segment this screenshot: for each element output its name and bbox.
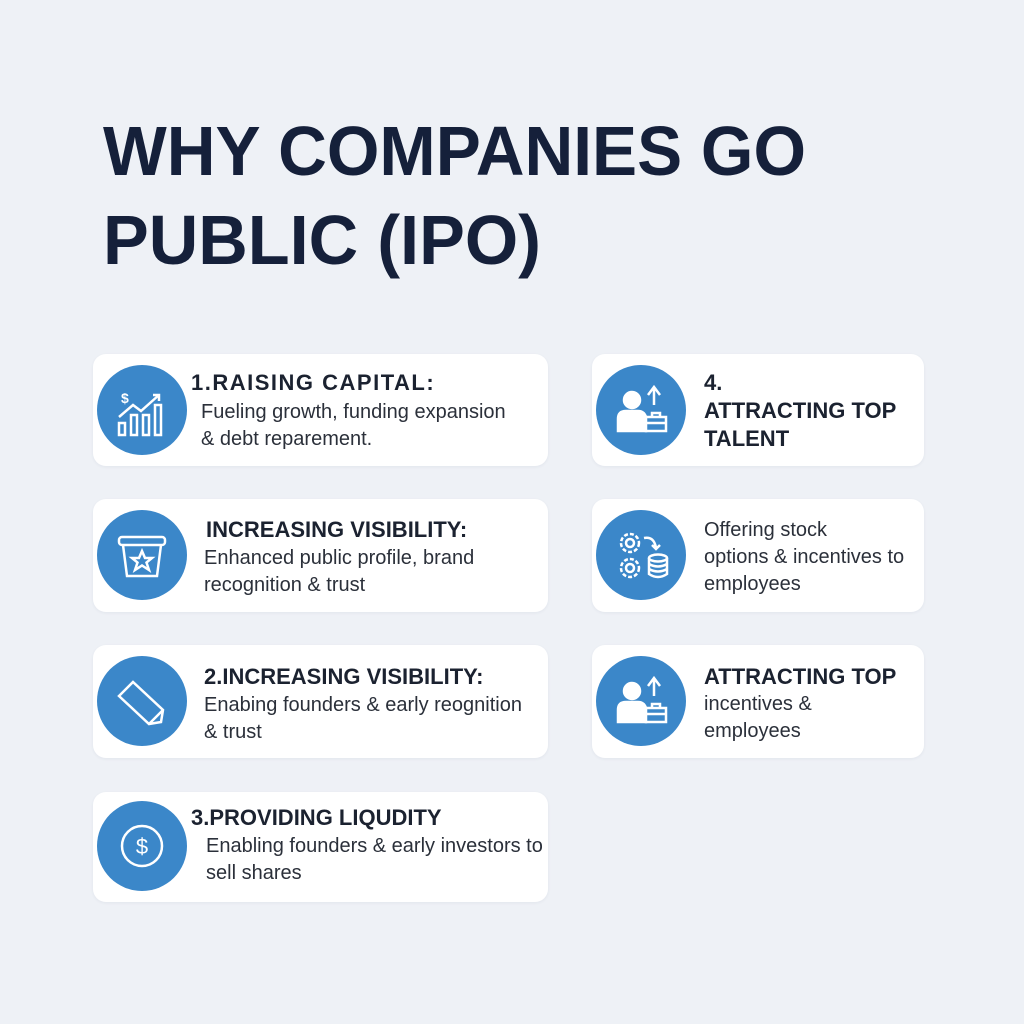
icon: person briefcase <box>596 365 686 455</box>
icon: gears and coins <box>596 510 686 600</box>
card: attracting top talent: ATTRACTING TOP <box>704 398 896 423</box>
card: increasing visibility: recognition & trust <box>204 574 365 596</box>
card: raising capital <box>93 354 548 466</box>
card: raising capital: 1.RAISING CAPITAL: <box>191 370 435 395</box>
card: raising capital: & debt reparement. <box>201 428 372 450</box>
card: attracting top <box>592 645 924 758</box>
title <box>103 112 806 279</box>
title: WHY COMPANIES GO <box>103 112 806 190</box>
icon: dollar coin: $ <box>136 834 148 859</box>
title: PUBLIC (IPO) <box>103 201 541 279</box>
icon: dollar coin <box>97 801 187 891</box>
card: attracting top: employees <box>704 720 801 742</box>
card: 2 increasing visibility: Enabing founders & early reognition <box>204 694 522 716</box>
icon: chart: $ <box>121 390 129 406</box>
card: attracting top: ATTRACTING TOP <box>704 664 896 689</box>
icon: star stand <box>97 510 187 600</box>
card: increasing visibility <box>93 499 548 612</box>
card: attracting top talent <box>592 354 924 466</box>
icon: chart <box>97 365 187 455</box>
card: attracting top talent: TALENT <box>704 426 789 451</box>
card: attracting top: incentives & <box>704 693 812 715</box>
card: stock options: Offering stock <box>704 519 827 541</box>
card: raising capital: Fueling growth, funding expansion <box>201 401 506 423</box>
card: increasing visibility: INCREASING VISIBILITY: <box>206 517 467 542</box>
icon: person briefcase 2 <box>596 656 686 746</box>
card: attracting top talent: 4. <box>704 370 722 395</box>
card: stock options: options & incentives to <box>704 546 904 568</box>
card: providing liquidity: sell shares <box>206 862 302 884</box>
card: 2 increasing visibility: & trust <box>204 721 262 743</box>
card: providing liquidity: 3.PROVIDING LIQUDITY <box>191 805 442 830</box>
card: stock options: employees <box>704 573 801 595</box>
card: providing liquidity <box>93 792 548 902</box>
card: 2 increasing visibility <box>93 645 548 758</box>
card: 2 increasing visibility: 2.INCREASING VISIBILITY: <box>204 664 484 689</box>
card: increasing visibility: Enhanced public profile, brand <box>204 547 474 569</box>
card: providing liquidity: Enabling founders & early investors to <box>206 835 543 857</box>
icon: tag <box>97 656 187 746</box>
card: stock options <box>592 499 924 612</box>
